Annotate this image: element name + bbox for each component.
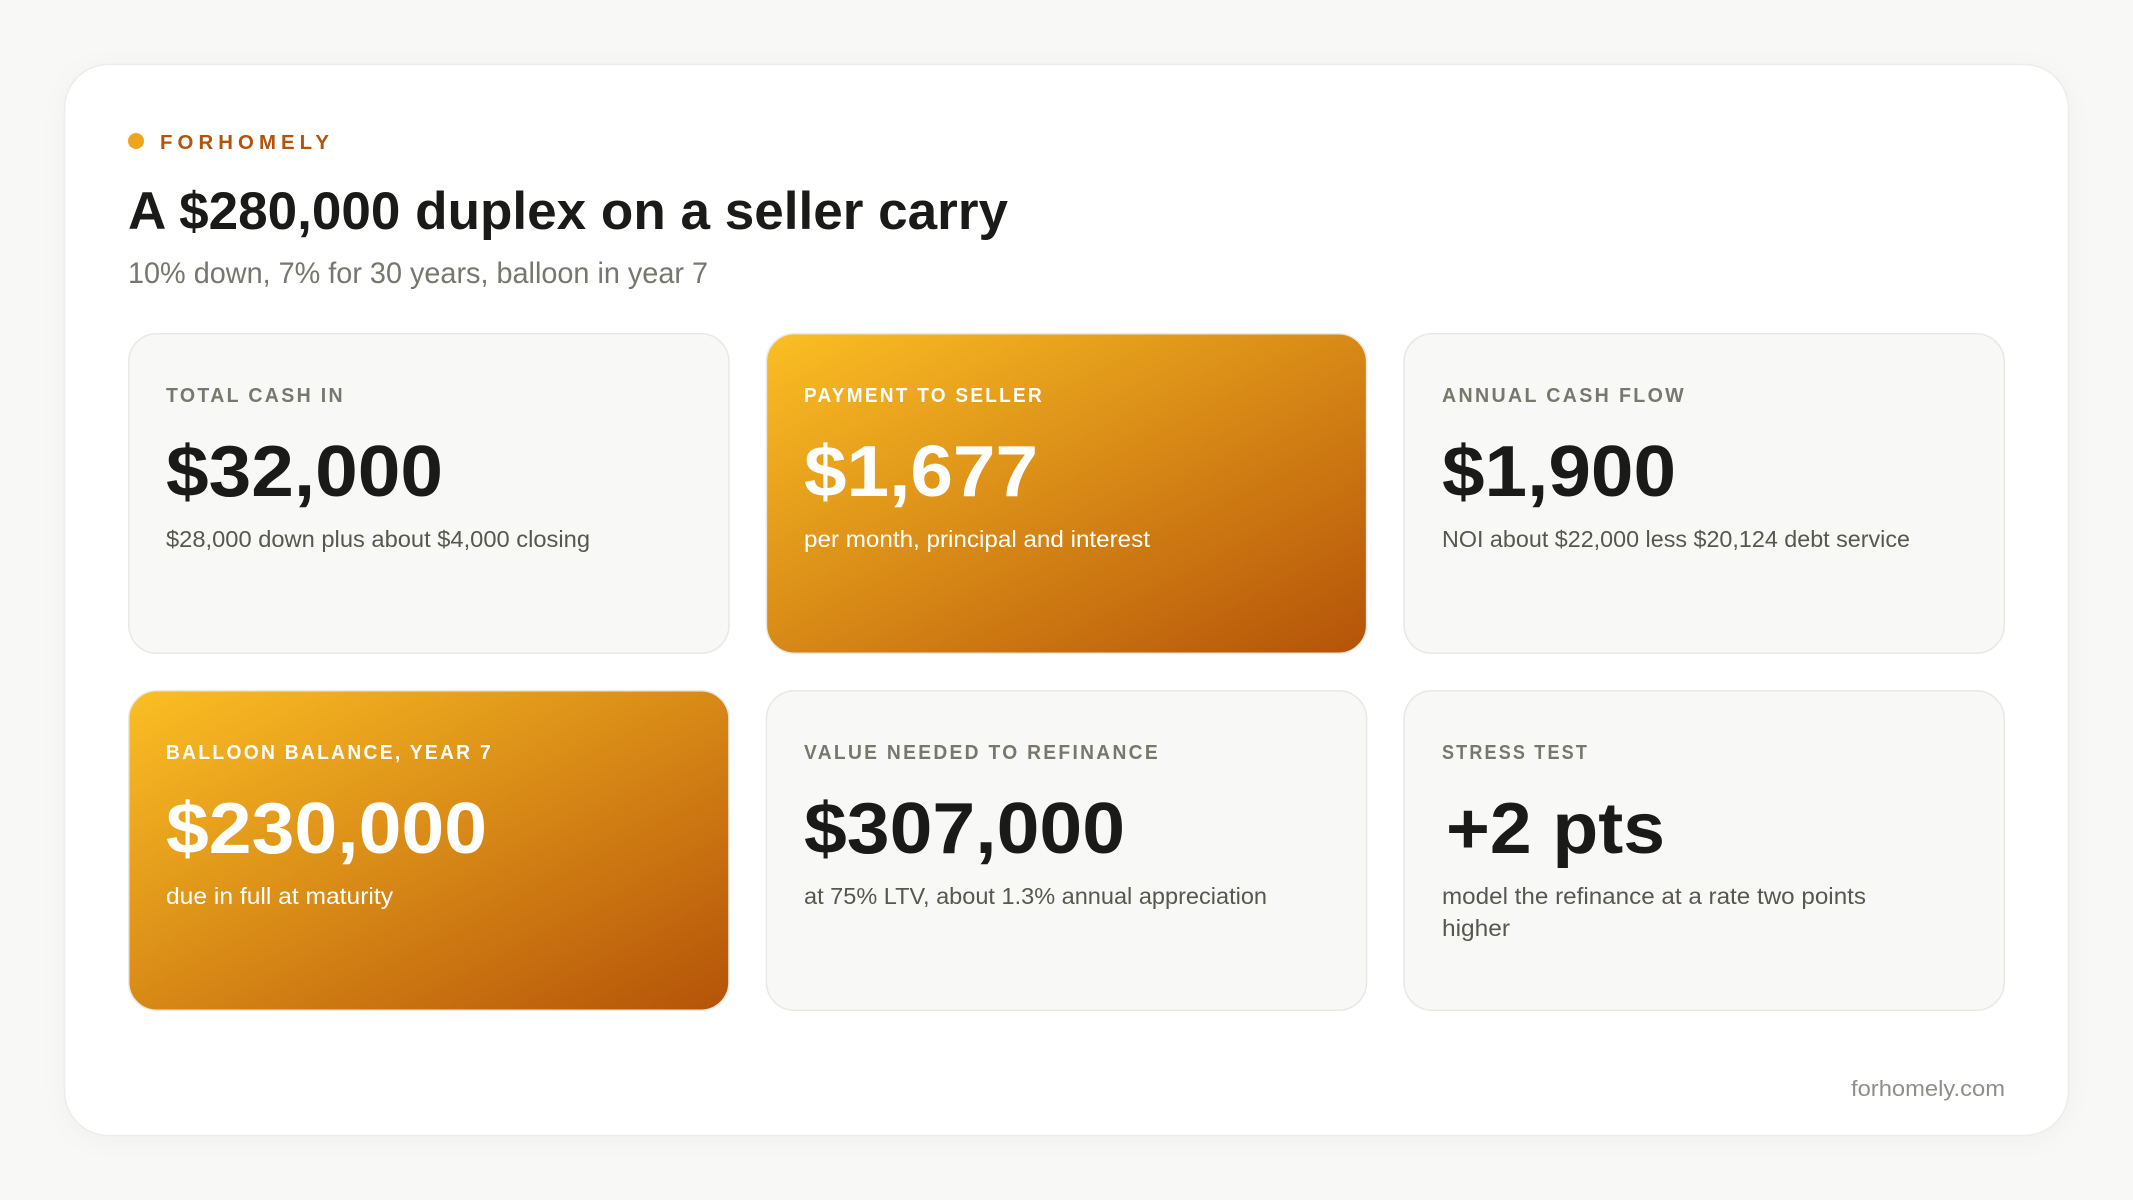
value: $1,900 [1442,432,1676,512]
brand name: FORHOMELY [160,132,334,154]
note: at 75% LTV, about 1.3% annual appreciation [804,883,1267,909]
header [128,132,1008,290]
panel: payment to seller [766,334,1367,653]
subtitle: 10% down, 7% for 30 years, balloon in year 7 [128,257,708,290]
icon: brand dot [128,133,144,149]
label: ANNUAL CASH FLOW [1442,385,1686,407]
note: due in full at maturity [166,883,393,909]
panel: total cash in [129,334,729,653]
value: $1,677 [804,432,1038,512]
value: $307,000 [804,789,1125,869]
note: model the refinance at a rate two points [1442,883,1866,909]
footer link: forhomely.com [1851,1076,2005,1101]
title: A $280,000 duplex on a seller carry [128,182,1008,241]
note: higher [1442,915,1510,941]
note: NOI about $22,000 less $20,124 debt service [1442,526,1910,552]
label: BALLOON BALANCE, YEAR 7 [166,742,493,764]
label: STRESS TEST [1442,742,1589,764]
panel: balloon balance [129,691,729,1010]
value: +2 pts [1446,789,1665,869]
label: VALUE NEEDED TO REFINANCE [804,742,1160,764]
note: $28,000 down plus about $4,000 closing [166,526,590,552]
panel: annual cash flow [1404,334,2004,653]
note [1442,883,1866,941]
panel: stress test [1404,691,2004,1010]
label: PAYMENT TO SELLER [804,385,1044,407]
panel: value needed to refinance [766,691,1367,1010]
note: per month, principal and interest [804,526,1150,552]
label: TOTAL CASH IN [166,385,345,407]
value: $32,000 [166,432,443,512]
value: $230,000 [166,789,487,869]
brand eyebrow [128,132,334,154]
